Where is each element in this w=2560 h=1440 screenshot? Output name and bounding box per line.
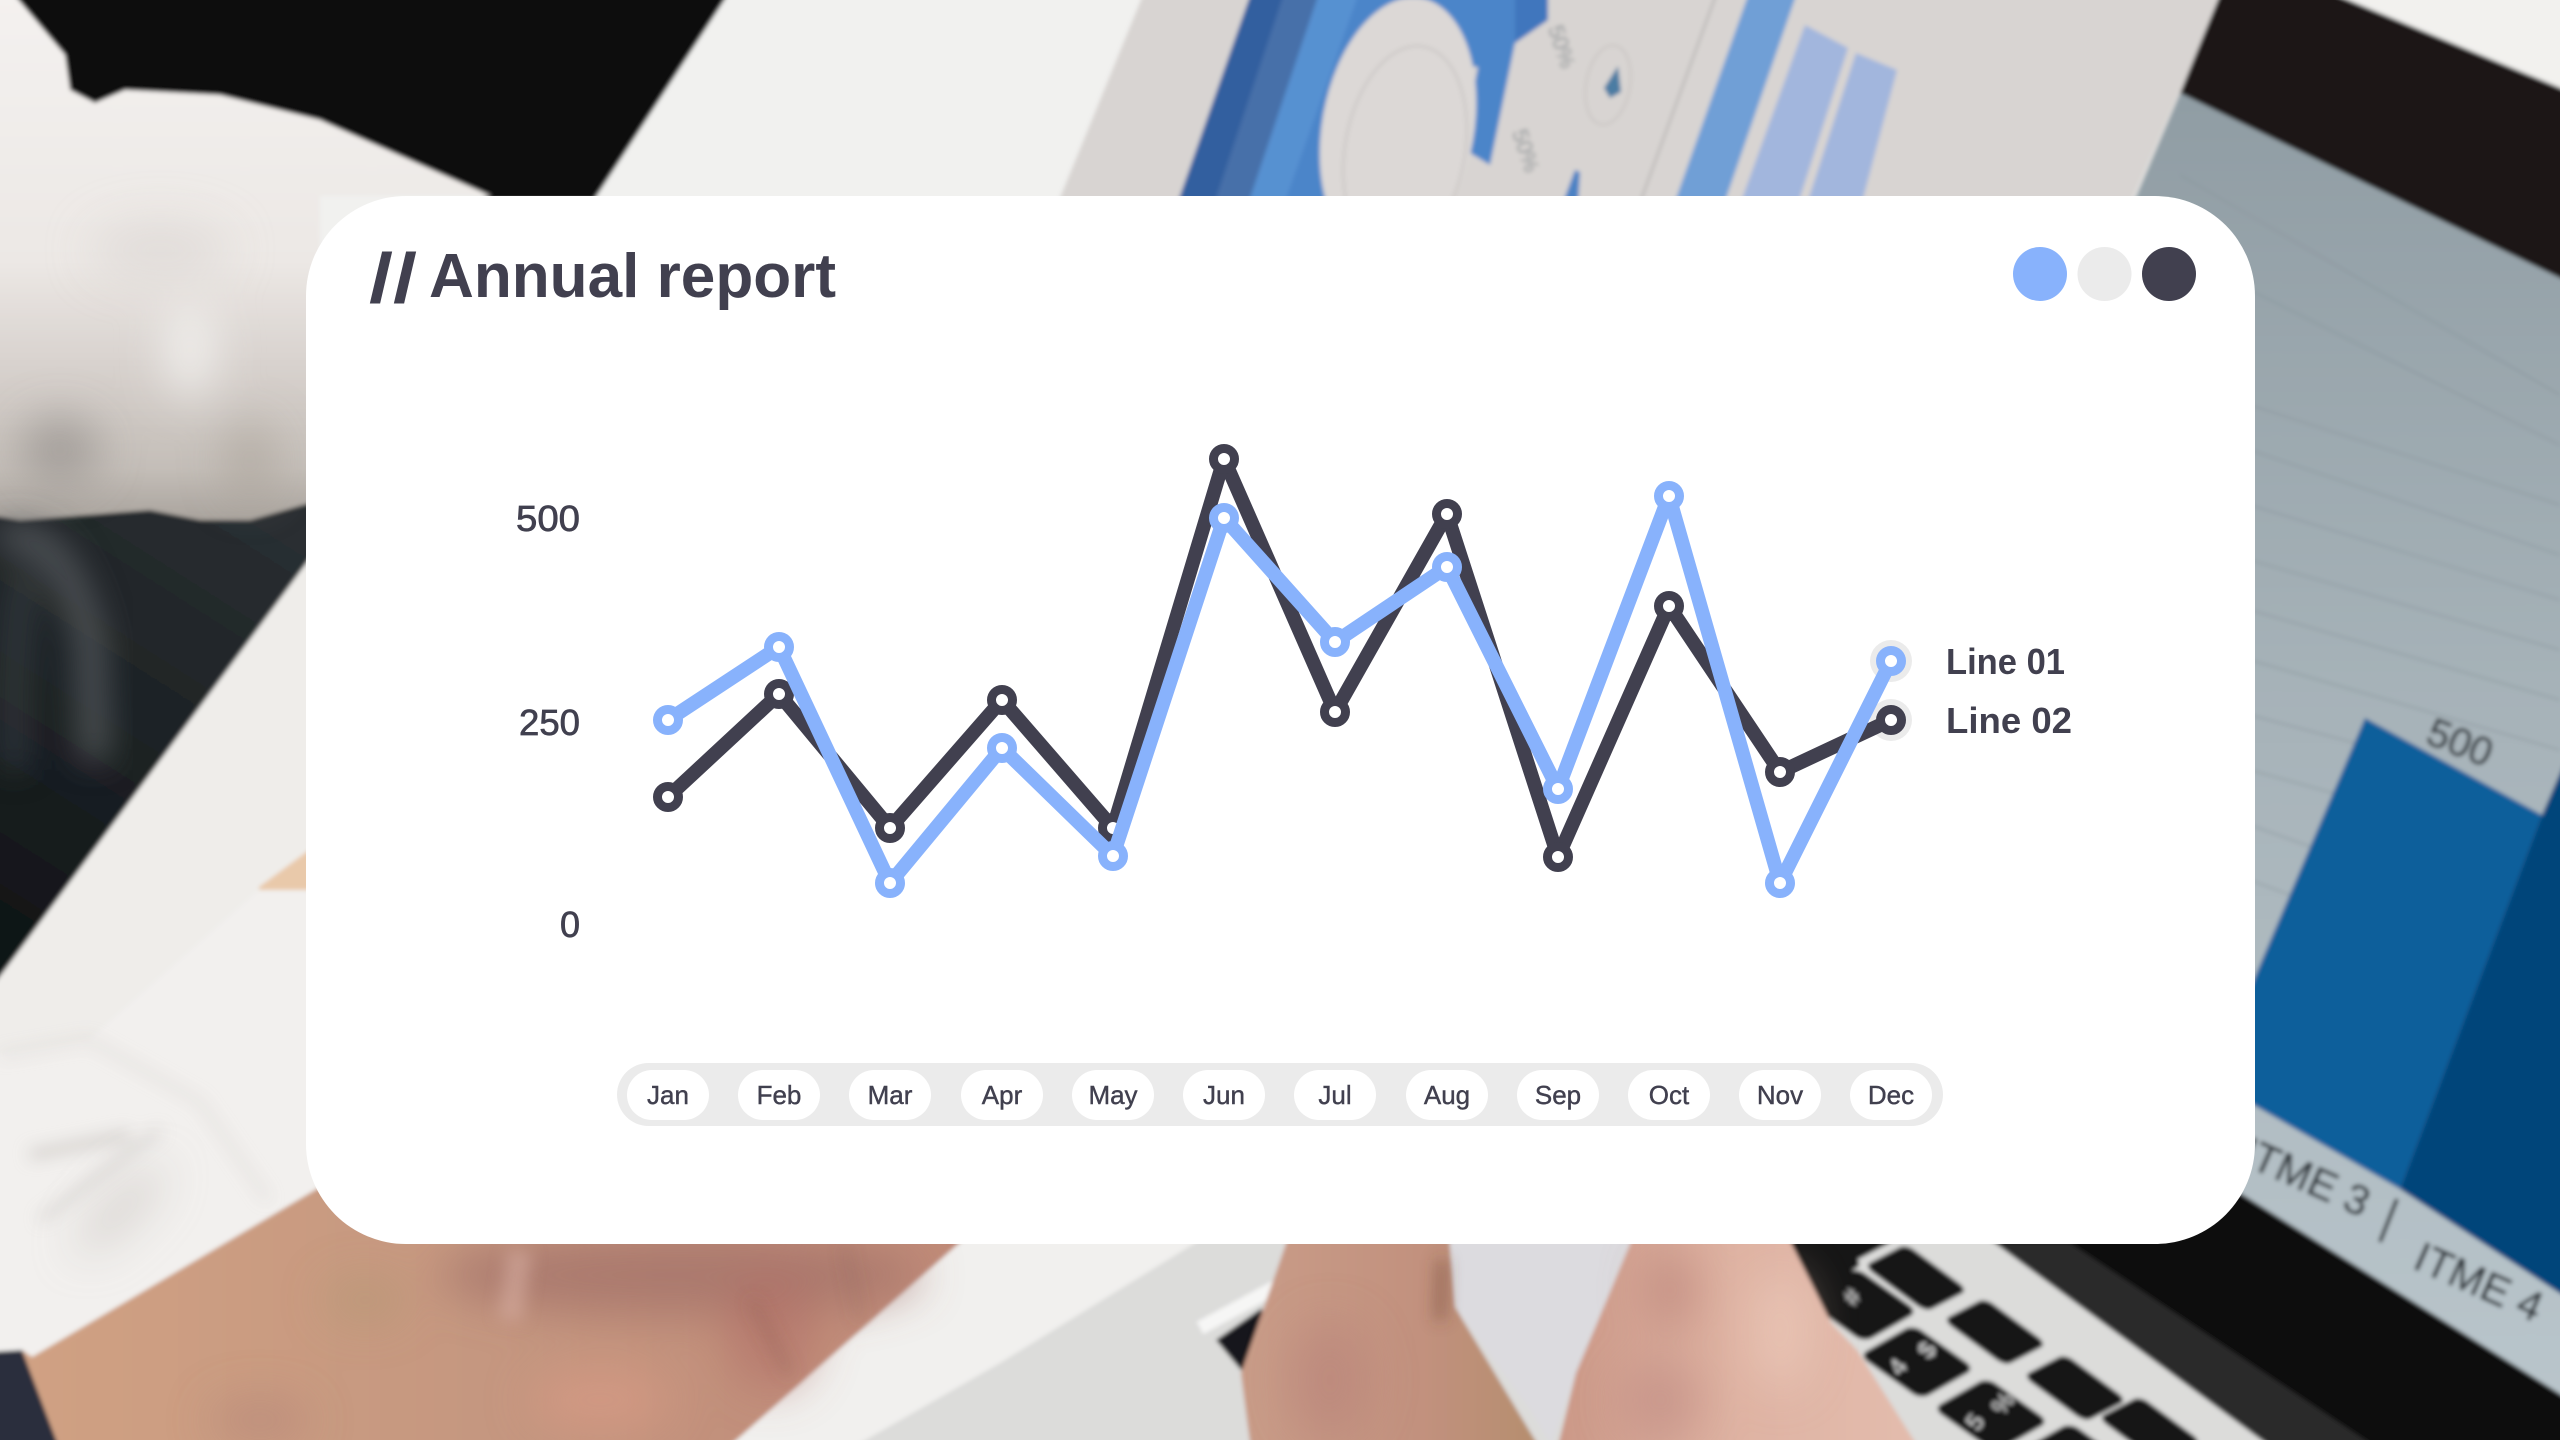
month selector: May [1088,1080,1138,1110]
month selector: Aug [1424,1080,1470,1110]
key legends: 4 [1884,1354,1913,1381]
key legends: $ [1913,1337,1942,1364]
finger creases and shirt folds [0,1040,1442,1375]
touch edge white curve [1200,1287,1276,1328]
month selector: Dec [1868,1080,1914,1110]
line chart [658,448,1912,894]
series: line 02 [658,448,1902,868]
report paper: 50% [1507,126,1545,175]
month selector [617,1063,1943,1126]
series: line 01 [658,486,1902,894]
month selector: Jun [1203,1080,1245,1110]
white paper on the left [0,545,320,1353]
key legends: % [1986,1387,2021,1420]
label: ITME 4: ITME 4 [2408,1233,2550,1331]
legend halo: line 02 [1870,699,1912,741]
dark cuff [0,1350,60,1440]
hand right [1557,1235,1920,1440]
month selector: Apr [982,1080,1023,1110]
shirt highlight on dark background [0,537,95,770]
black bezel upper right [2180,0,2560,283]
colour dots [2013,247,2196,301]
paper corner held [1449,1235,1634,1440]
legend label: Line 02: Line 02 [1946,700,2072,741]
dark upper background [10,0,731,200]
white paper stripe [725,1235,1208,1440]
title: Annual report [429,242,836,311]
month selector: Nov [1757,1080,1803,1110]
label: ITME 3: ITME 3 [2235,1128,2377,1226]
screen of the laptop [2130,93,2560,1400]
key legends [1838,1283,2021,1436]
y axis labels [516,498,580,945]
laptop hinge dark [1970,1193,2560,1440]
label: 500: 500 [2421,710,2499,776]
month selector: Jan [647,1080,689,1110]
y axis labels: 250 [519,702,580,743]
key sliver left of centre hand [1216,1308,1262,1370]
laptop silver body [740,1235,2275,1440]
legend halo: line 01 [1870,640,1912,682]
month selector: Jul [1318,1080,1352,1110]
peach wedge [259,842,320,892]
lower sleeve [0,890,320,1357]
report paper: 50% [1543,22,1581,71]
white sleeve [0,0,491,520]
key legends: # [1838,1283,1868,1311]
dark lower background [0,500,320,990]
title: // [369,239,417,317]
soft photo shading [20,220,1810,1440]
y axis labels: 500 [516,498,580,539]
month selector: Sep [1535,1080,1581,1110]
month selector: Mar [868,1080,913,1110]
report paper [1055,0,2224,271]
month selector: Oct [1649,1080,1690,1110]
y axis labels: 0 [560,904,580,945]
card background [306,196,2255,1244]
laptop grid lines [2180,175,2560,895]
month selector: Feb [757,1080,801,1110]
keyboard keys [1748,1194,2202,1440]
legend label: Line 01: Line 01 [1946,641,2065,682]
hand centre [1241,1235,1541,1440]
blue bars on screen [2245,718,2542,1189]
key legends: 5 [1961,1409,1990,1436]
hand left [22,1187,965,1440]
